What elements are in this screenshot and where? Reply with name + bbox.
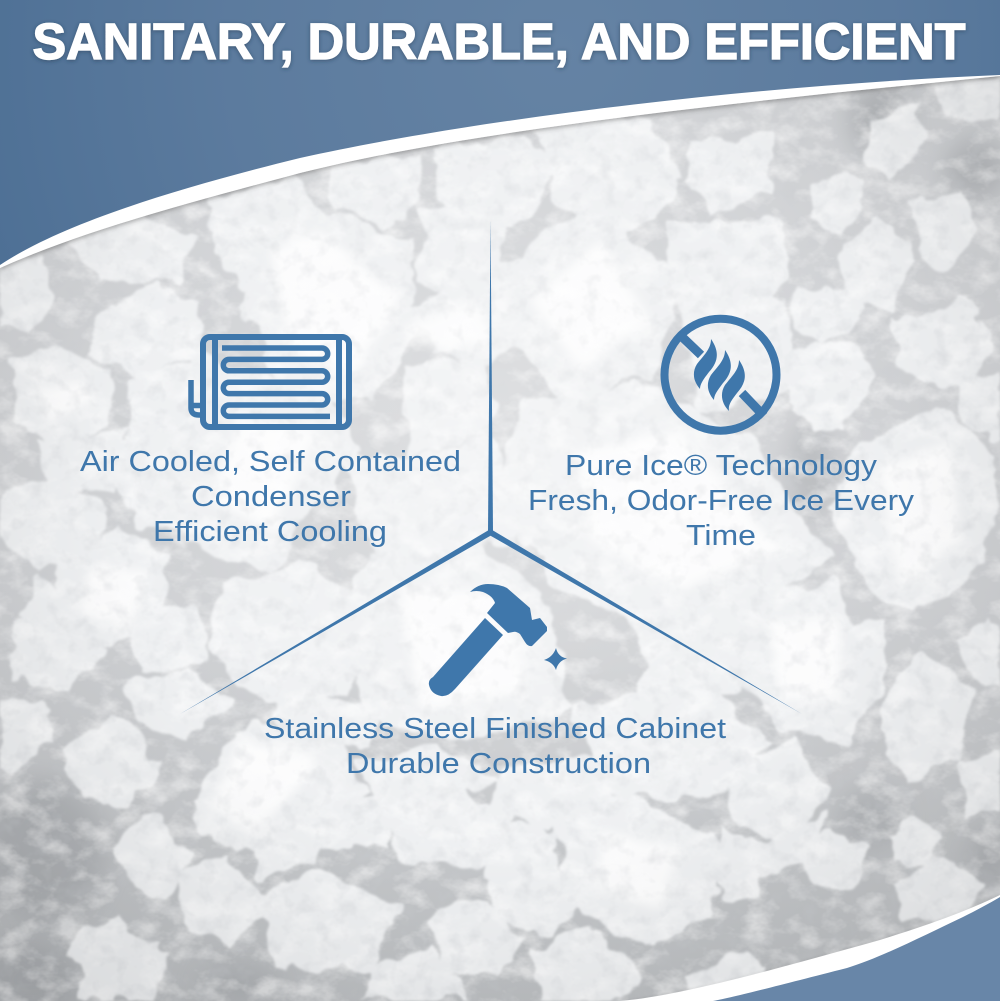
icon: no odor (664, 319, 776, 431)
text: pure ice technology: Time (686, 520, 756, 552)
header band with swoosh (0, 0, 1000, 268)
text: air cooled condenser: Efficient Cooling (153, 516, 387, 548)
three-way divider lines (180, 220, 802, 714)
icon: hammer (429, 584, 567, 696)
text: pure ice technology: Pure Ice® Technology (565, 450, 878, 482)
ice highlights (30, 230, 960, 910)
text: pure ice technology (528, 450, 915, 552)
text: stainless steel cabinet (264, 713, 726, 780)
text: stainless steel cabinet: Stainless Steel Finished Cabinet (264, 713, 726, 745)
icon: air-cooled condenser (191, 336, 349, 428)
text: air cooled condenser: Condenser (191, 481, 352, 513)
text: pure ice technology: Fresh, Odor-Free Ice Every (528, 485, 915, 517)
text: stainless steel cabinet: Durable Construction (346, 748, 651, 780)
text: air cooled condenser (80, 446, 461, 548)
bottom-right corner swoosh (620, 895, 1000, 1001)
text: air cooled condenser: Air Cooled, Self Contained (80, 446, 461, 478)
title: SANITARY, DURABLE, AND EFFICIENT (32, 13, 966, 70)
